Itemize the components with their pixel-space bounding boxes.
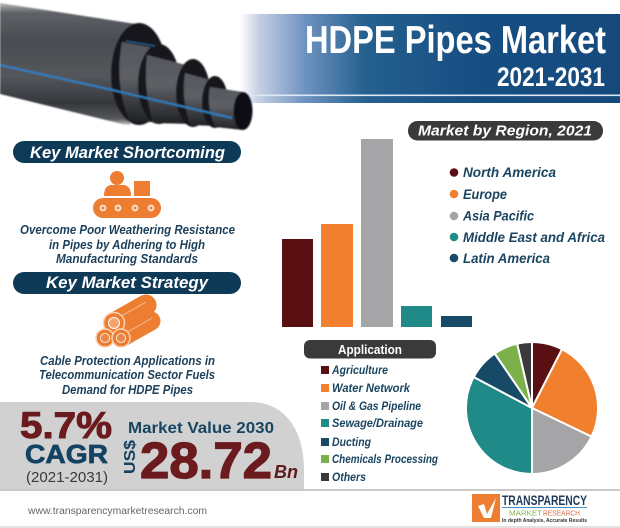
text: shortcoming description: Manufacturing Standards — [56, 252, 198, 266]
icon: pipe bundle — [96, 302, 152, 347]
legend: regions — [450, 164, 605, 266]
legend: applications: Oil & Gas Pipeline — [332, 401, 422, 413]
website url: www.transparencymarketresearch.com — [27, 505, 207, 517]
bar chart: market by region — [282, 139, 472, 327]
heading: market by region: Market by Region, 2021 — [418, 122, 592, 140]
text: strategy description — [39, 354, 215, 397]
legend: regions: Latin America — [463, 250, 550, 266]
text: shortcoming description: Overcome Poor Weathering Resistance — [20, 223, 235, 237]
text: shortcoming description: in Pipes by Adhering to High — [49, 238, 205, 252]
CAGR period: (2021-2031) — [26, 469, 108, 486]
unit: Bn — [274, 462, 298, 482]
pie chart: application — [466, 342, 598, 474]
legend: regions: Middle East and Africa — [463, 229, 605, 245]
panel: market stats — [0, 402, 304, 490]
heading: application: Application — [338, 343, 402, 357]
heading: key market strategy: Key Market Strategy — [46, 273, 210, 292]
icon: conveyor worker — [93, 171, 161, 218]
legend: regions: North America — [463, 164, 556, 180]
heading: key market shortcoming: Key Market Shortcoming — [30, 143, 226, 162]
legend: applications: Water Network — [332, 383, 411, 395]
logo: In depth Analysis, Accurate Results — [502, 518, 587, 524]
legend: regions: Europe — [463, 186, 507, 202]
logo — [472, 493, 587, 524]
logo: TRANSPARENCY — [502, 493, 587, 508]
legend: applications: Ducting — [332, 437, 371, 449]
title banner — [240, 14, 620, 103]
market value label: Market Value 2030 — [128, 420, 274, 437]
legend: applications: Others — [332, 472, 366, 484]
text: strategy description: Demand for HDPE Pipes — [62, 383, 193, 397]
legend: applications: Sewage/Drainage — [332, 418, 424, 430]
legend: applications — [321, 365, 438, 484]
CAGR value: 5.7% — [20, 405, 112, 446]
legend: applications: Agriculture — [331, 365, 389, 377]
market value: 28.72 — [140, 432, 272, 489]
currency: US$ — [122, 440, 139, 474]
heading: application — [304, 340, 436, 358]
heading: key market strategy — [13, 272, 241, 294]
pipes image — [0, 3, 252, 130]
text: strategy description: Cable Protection Applications in — [40, 354, 215, 368]
CAGR label: CAGR — [25, 439, 108, 469]
logo: MARKET — [509, 510, 543, 518]
legend: regions: Asia Pacific — [462, 208, 534, 224]
text: strategy description: Telecommunication Sector Fuels — [39, 368, 215, 382]
text: shortcoming description — [20, 223, 235, 266]
legend: applications: Chemicals Processing — [332, 454, 438, 466]
logo: RESEARCH — [543, 510, 580, 518]
